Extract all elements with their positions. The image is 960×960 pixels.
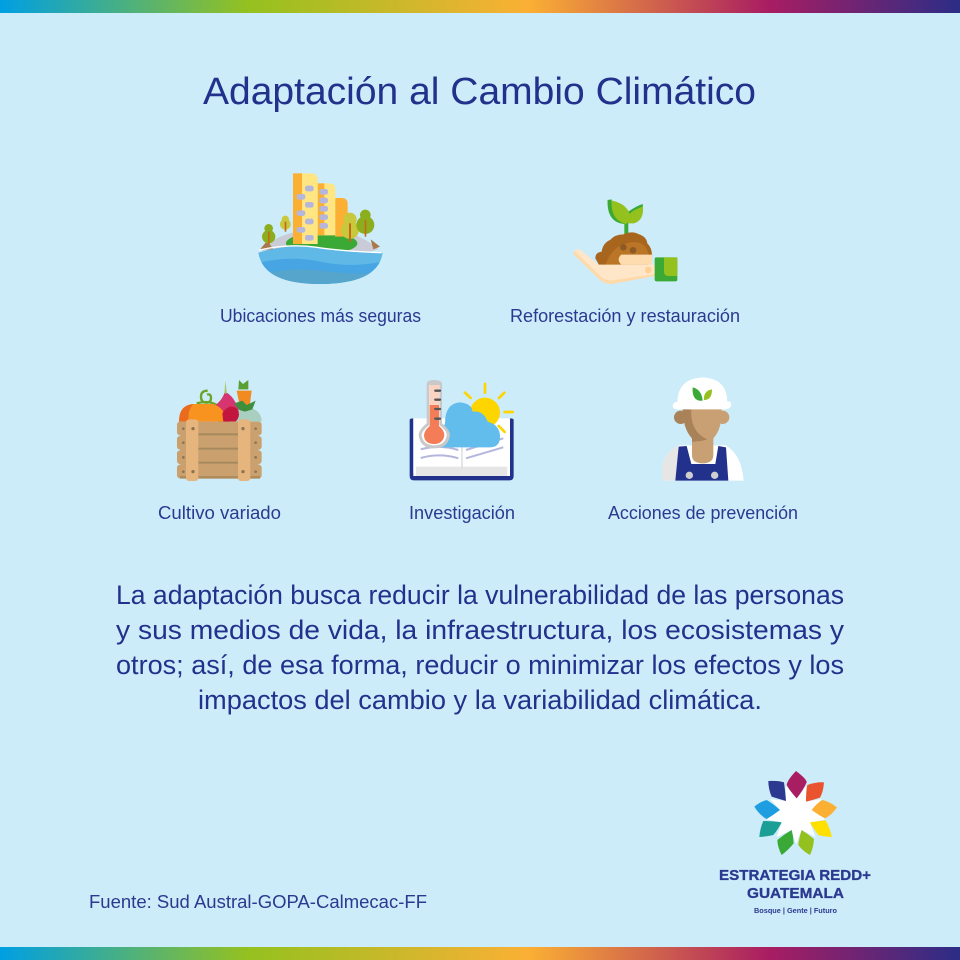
label: prevention: Acciones de prevención — [608, 503, 798, 523]
body paragraph: y sus medios de vida, la infraestructura, los ecosistemas y — [116, 615, 845, 645]
top rainbow bar — [0, 0, 960, 13]
label: research: Investigación — [409, 503, 515, 523]
icon: worker with helmet — [662, 377, 744, 481]
title: Adaptación al Cambio Climático — [203, 71, 756, 113]
icon: book with thermometer and weather — [410, 380, 514, 480]
source note: Fuente: Sud Austral-GOPA-Calmecac-FF — [89, 892, 427, 912]
body paragraph — [116, 580, 845, 715]
icon: hand with seedling — [573, 199, 677, 284]
icon: crate of vegetables — [177, 380, 262, 481]
label: reforestation: Reforestación y restauración — [510, 306, 740, 326]
logo: Estrategia REDD+ Guatemala: GUATEMALA — [747, 886, 845, 902]
body paragraph: impactos del cambio y la variabilidad climática. — [198, 685, 762, 715]
logo wordmark: ESTRATEGIA REDD+ — [719, 868, 871, 884]
bottom rainbow bar — [0, 947, 960, 960]
logo flower — [754, 771, 837, 855]
label: safer locations: Ubicaciones más seguras — [220, 306, 421, 326]
logo: Estrategia REDD+ Guatemala — [719, 771, 871, 915]
label: varied crops: Cultivo variado — [158, 503, 281, 523]
icon: safer locations — [257, 173, 385, 287]
body paragraph: otros; así, de esa forma, reducir o minimizar los efectos y los — [116, 650, 844, 680]
body paragraph: La adaptación busca reducir la vulnerabilidad de las personas — [116, 580, 844, 610]
logo tagline: Bosque | Gente | Futuro — [754, 906, 837, 915]
